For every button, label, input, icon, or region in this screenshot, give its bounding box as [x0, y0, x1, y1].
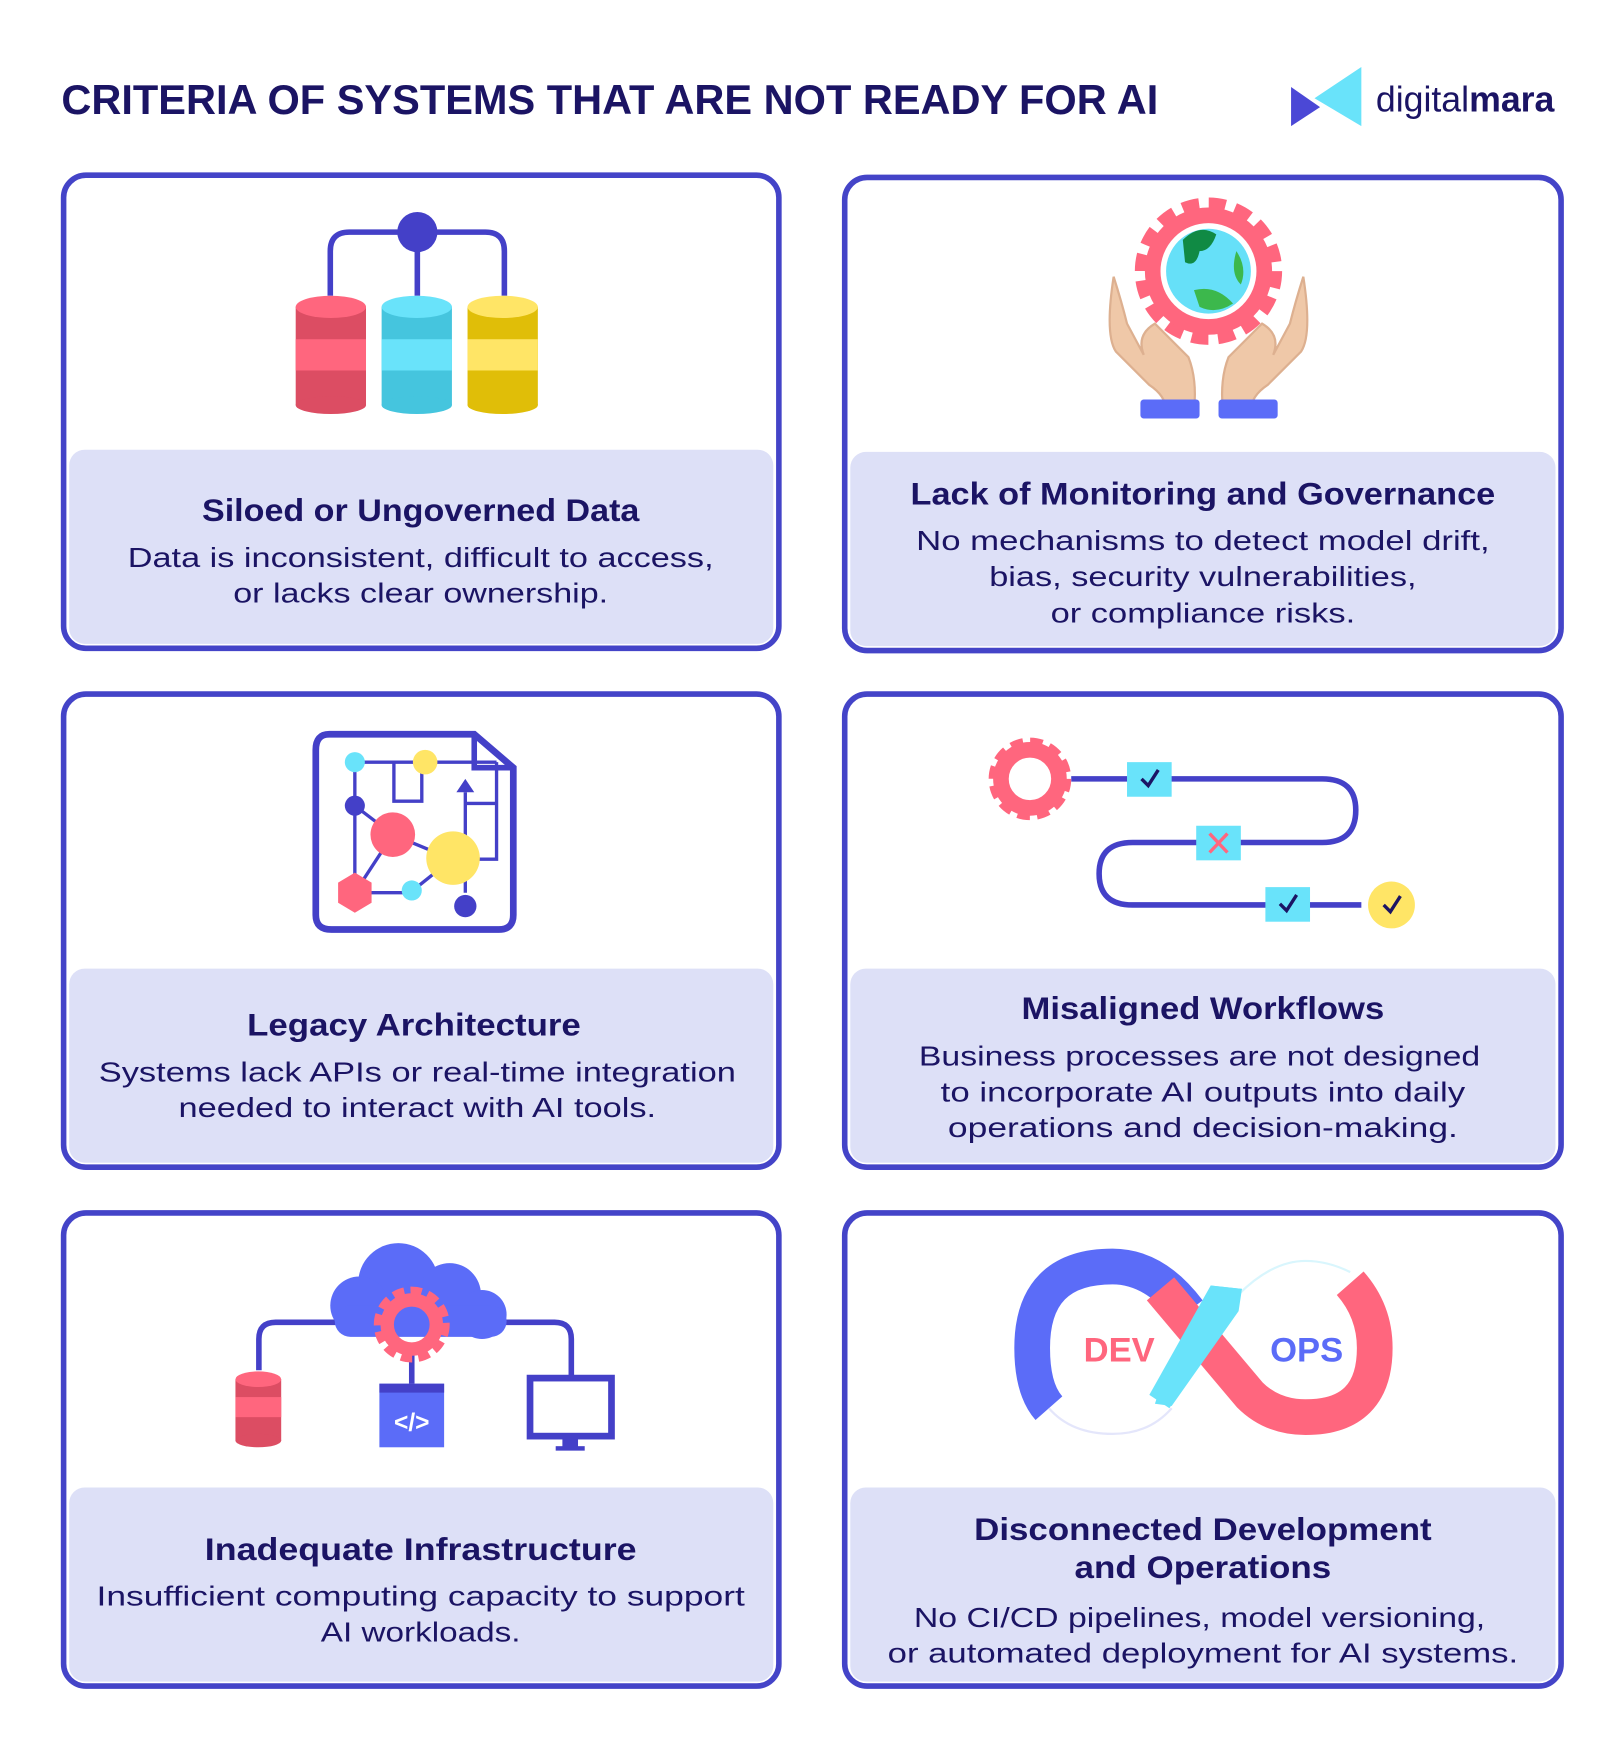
body text	[128, 542, 714, 609]
body text: AI workloads.	[321, 1616, 521, 1647]
body text: or compliance risks.	[1051, 598, 1355, 629]
body text	[916, 525, 1490, 629]
icon: devops infinity	[1032, 1261, 1375, 1434]
heading	[974, 1512, 1432, 1585]
panel: siloed data	[64, 175, 779, 648]
body text: Insufficient computing capacity to support	[97, 1581, 745, 1612]
body text: Business processes are not designed	[919, 1041, 1480, 1072]
panel: devops	[845, 1213, 1561, 1686]
panel: infrastructure	[64, 1213, 779, 1686]
body text	[919, 1041, 1480, 1143]
body text	[888, 1602, 1518, 1669]
icon: workflow path	[996, 745, 1415, 928]
title: CRITERIA OF SYSTEMS THAT ARE NOT READY FOR AI	[61, 77, 1158, 123]
heading: Inadequate Infrastructure	[205, 1532, 637, 1567]
heading: and Operations	[1075, 1550, 1331, 1585]
icon: cloud network: </>	[394, 1410, 429, 1437]
body text: needed to interact with AI tools.	[179, 1092, 656, 1123]
icon: document with network	[316, 734, 513, 930]
body text: or automated deployment for AI systems.	[888, 1638, 1518, 1669]
icon: databases	[296, 212, 538, 414]
icon: hands with gear globe	[1110, 209, 1307, 418]
body text: No mechanisms to detect model drift,	[916, 525, 1490, 556]
body text	[97, 1581, 745, 1647]
body text: No CI/CD pipelines, model versioning,	[914, 1602, 1485, 1633]
heading: Siloed or Ungoverned Data	[202, 493, 640, 528]
panel: legacy architecture	[64, 694, 779, 1167]
logo	[1291, 67, 1556, 126]
body text: Systems lack APIs or real-time integration	[99, 1056, 736, 1087]
logo: digitalmara	[1376, 80, 1556, 120]
body text: to incorporate AI outputs into daily	[941, 1076, 1465, 1107]
body text: or lacks clear ownership.	[233, 578, 608, 609]
icon: devops infinity: DEV	[1084, 1331, 1155, 1369]
body text: Data is inconsistent, difficult to access,	[128, 542, 714, 573]
icon: devops infinity: OPS	[1270, 1331, 1343, 1369]
heading: Misaligned Workflows	[1022, 991, 1384, 1026]
icon: cloud network	[235, 1243, 611, 1451]
body text: operations and decision-making.	[948, 1112, 1458, 1143]
heading: Disconnected Development	[974, 1512, 1432, 1547]
panel: monitoring	[845, 177, 1561, 651]
panel: misaligned workflows	[845, 694, 1561, 1167]
body text	[99, 1056, 736, 1123]
heading: Lack of Monitoring and Governance	[911, 476, 1495, 511]
heading: Legacy Architecture	[247, 1008, 581, 1043]
body text: bias, security vulnerabilities,	[989, 561, 1417, 592]
